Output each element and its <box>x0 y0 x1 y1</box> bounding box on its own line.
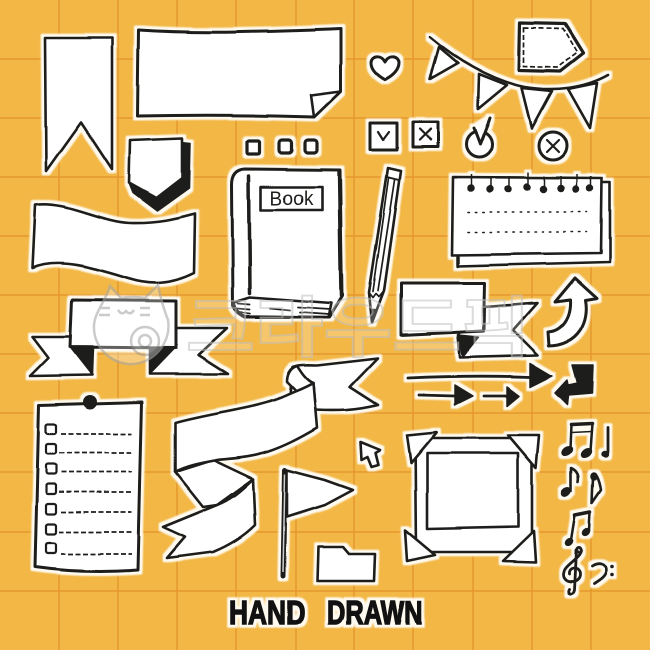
bunting <box>430 37 608 128</box>
long arrow <box>408 363 552 387</box>
left ribbon banner <box>30 300 228 376</box>
book title: Book <box>270 188 314 210</box>
treble clef <box>563 547 581 594</box>
notebook rings <box>468 172 593 192</box>
heart <box>371 57 399 80</box>
photo corners <box>405 432 539 562</box>
circle cross <box>539 132 567 160</box>
black bent arrow <box>555 365 593 405</box>
circle check <box>466 118 492 157</box>
small speech banner <box>401 283 538 357</box>
pennant flag <box>283 470 353 576</box>
title: DRAWN <box>327 594 423 631</box>
bass clef <box>592 564 614 584</box>
medium arrow <box>419 385 473 405</box>
watermark text: 크라우드픽 <box>186 291 530 365</box>
beamed notes low <box>564 512 591 547</box>
curved up arrow <box>548 278 597 346</box>
shield badge <box>129 138 190 211</box>
large ribbon <box>163 358 378 558</box>
check boxes <box>46 424 56 553</box>
pin <box>83 395 97 409</box>
beamed notes <box>560 424 593 459</box>
notebook <box>452 172 610 266</box>
bookmark banner <box>45 38 112 171</box>
eighth note <box>560 468 578 498</box>
pencil <box>369 168 401 323</box>
stitched tag <box>519 23 583 71</box>
book label <box>261 187 322 210</box>
wavy banner <box>32 204 195 283</box>
title <box>229 594 423 631</box>
check box <box>370 123 397 150</box>
checklist note <box>35 395 142 571</box>
book <box>232 169 342 317</box>
notebook dotted lines <box>468 212 587 232</box>
watermark cat <box>94 285 168 364</box>
photo frame <box>405 432 539 562</box>
folder <box>317 547 375 581</box>
three small squares <box>247 140 317 154</box>
flagged note <box>591 472 601 503</box>
cross box <box>413 122 438 147</box>
paper note with folded corner <box>137 29 341 117</box>
cursor arrow <box>360 442 380 467</box>
quarter note <box>602 428 608 456</box>
list lines <box>59 434 132 554</box>
title: HAND <box>229 594 305 631</box>
short arrow <box>484 387 519 406</box>
watermark <box>94 285 530 365</box>
